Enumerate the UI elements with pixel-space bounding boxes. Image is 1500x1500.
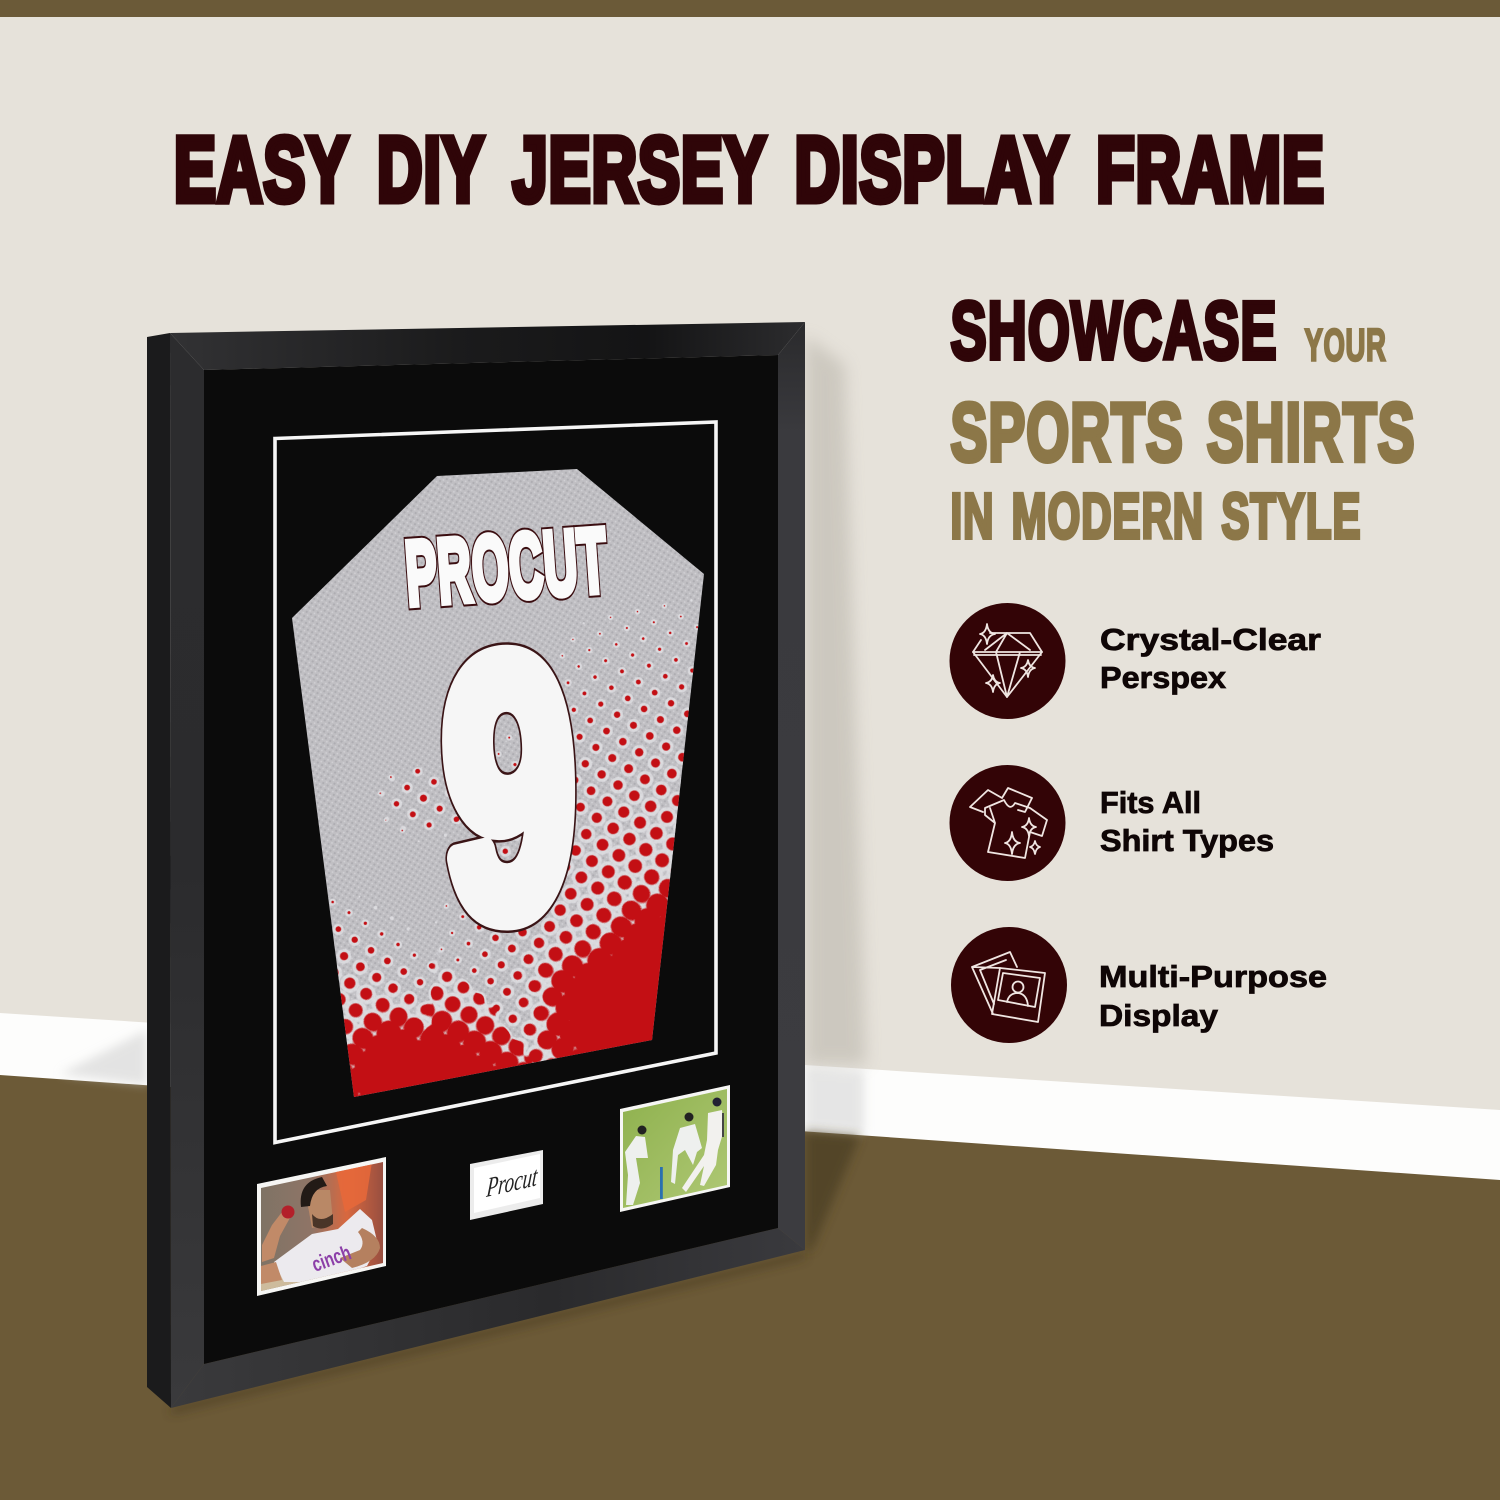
feature label [1100,622,1321,695]
cricket action photo [620,1085,730,1212]
signature card: Procut [485,1160,540,1203]
frame side face [147,333,171,1408]
frame bottom rail [171,1228,805,1408]
feature label [1099,959,1327,1033]
headline: showcase your sports shirts in modern style [950,286,1416,552]
headline word: showcase: SHOWCASE [950,286,1278,376]
feature label: Display [1099,998,1219,1033]
icon: photos [951,927,1067,1043]
signature card [470,1150,543,1220]
headline word: your: YOUR [1304,320,1386,370]
white shirt [274,1209,378,1282]
jersey name: PROCUT [402,510,611,625]
frame shadow [60,335,866,1414]
frame right rail [778,322,805,1250]
wicketkeeper [625,1126,648,1205]
player photo [255,1155,390,1299]
top band [0,0,1500,17]
far arm [340,1228,380,1268]
feature label: Shirt Types [1100,823,1274,858]
feature label: Fits All [1100,785,1201,820]
jersey number: 9 [440,583,578,992]
shirt sponsor: cinch [309,1241,354,1277]
black mount board [204,355,778,1364]
slip fielder [671,1112,702,1184]
icon: shirts [950,765,1066,881]
floor [0,1075,1500,1500]
cricket ball [282,1206,294,1218]
white inner border [275,422,716,1142]
batsman [682,1098,724,1192]
jersey fabric [292,469,704,1097]
stumps [660,1167,663,1199]
feature: fits all shirt types [950,765,1274,881]
jersey number: 9 [440,583,578,992]
feature label: Perspex [1100,660,1227,695]
picture frame [147,322,805,1408]
frame top rail [170,322,805,370]
feature: crystal-clear perspex [950,603,1321,719]
skirting board [0,1013,1500,1182]
bowling arm [262,1212,291,1262]
feature label [1100,785,1274,858]
feature label: Multi-Purpose [1099,959,1327,994]
jersey name: PROCUT [402,510,611,625]
icon: diamond [950,603,1066,719]
frame left rail [170,333,204,1408]
neck and head [308,1190,332,1228]
feature label: Crystal-Clear [1100,622,1321,657]
jersey name [402,510,611,625]
feature: multi-purpose display [951,927,1327,1043]
jersey number [440,583,578,992]
red halftone pattern [303,488,698,1097]
hair [301,1177,327,1207]
jersey back [292,469,704,1097]
